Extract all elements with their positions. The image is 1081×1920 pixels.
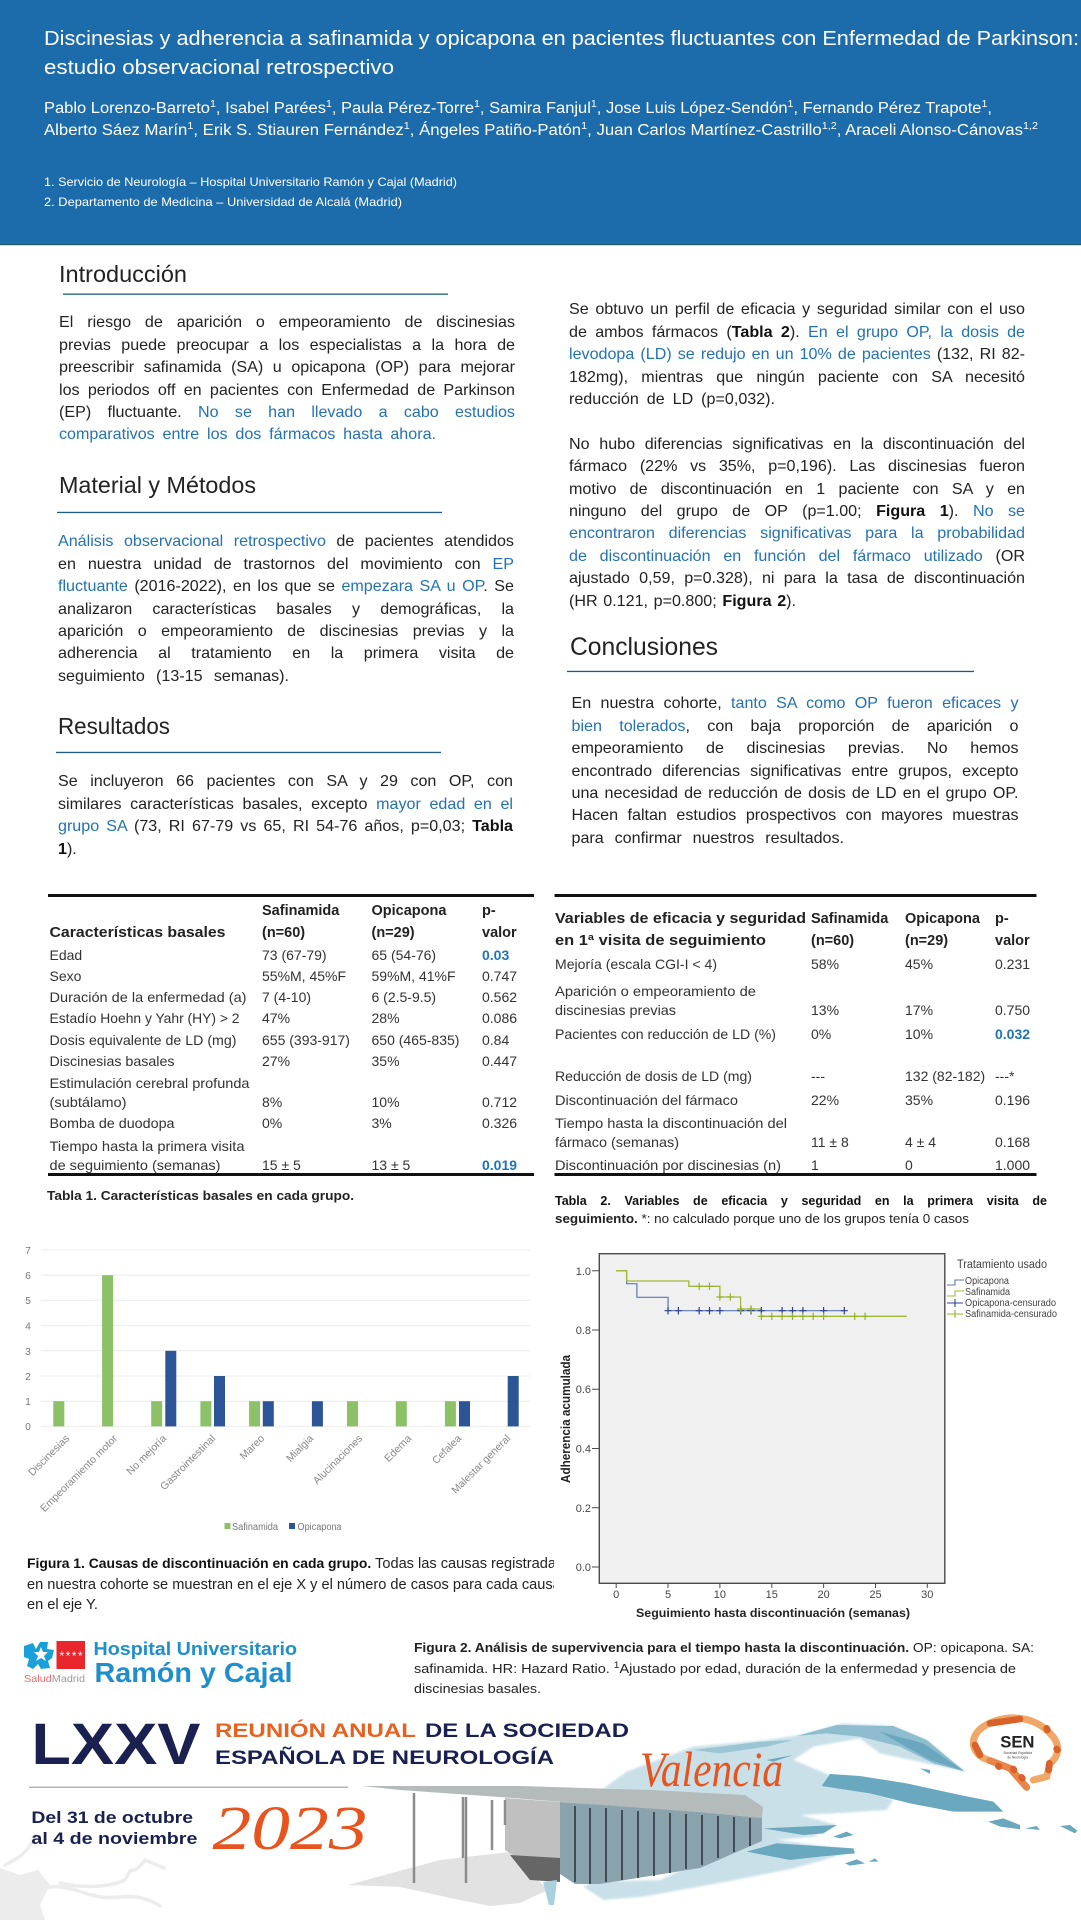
table 1: baseline characteristics (48, 894, 534, 1176)
figure 2 caption: 1 (614, 1660, 619, 1670)
table 1 rows: 27% (262, 1053, 290, 1069)
table 2 rows: 35% (905, 1092, 933, 1108)
table 1 header: valor (482, 925, 517, 941)
authors: , Jose Luis López-Sendón (597, 100, 788, 117)
affiliations: 2. Departamento de Medicina – Universidad de Alcalá (Madrid) (44, 195, 402, 209)
table 1 rows: 35% (372, 1053, 400, 1069)
safinamida bars (53, 1275, 456, 1426)
table 1 caption: Tabla 1. Características basales en cada grupo. (47, 1189, 354, 1203)
table 2 header (555, 911, 1030, 949)
authors: 1 (187, 121, 194, 132)
table 1 rows: 59%M, 41%F (372, 968, 456, 984)
heading: Conclusiones: Conclusiones (570, 633, 718, 661)
hospital logo: Hospital Universitario (94, 1639, 297, 1659)
survival legend: Safinamida-censurado (965, 1309, 1057, 1320)
text block: introducción: preescribir safinamida (SA) u opicapona (OP) para mejorar (59, 358, 515, 376)
hospital logo (24, 1639, 297, 1688)
y axis values: 1.0 (576, 1266, 591, 1278)
y axis values: 0.4 (576, 1444, 591, 1456)
table 1 rows: 28% (372, 1010, 400, 1026)
y axis values: 4 (25, 1322, 31, 1332)
table 1 rows: Sexo (50, 968, 82, 984)
table 2 rows: 132 (82-182) (905, 1068, 985, 1084)
table 1 rows: 0.562 (482, 989, 517, 1005)
x axis values: 30 (921, 1589, 933, 1601)
text block: resultados: similares características basales, excepto mayor edad en el (58, 794, 513, 812)
conference banner text: DE LA SOCIEDAD (425, 1720, 629, 1742)
table 2 rows: 0 (905, 1157, 913, 1173)
icon: red flag: **** (60, 1649, 83, 1663)
authors: , Paula Pérez-Torre (332, 100, 474, 117)
survival legend (947, 1259, 1057, 1320)
x axis categories: Mareo (238, 1433, 267, 1462)
text block: introducción: (EP) fluctuante. No se han llevado a cabo estudios (59, 402, 515, 420)
y axis values (576, 1266, 591, 1574)
table 1 rows: 0.03 (482, 947, 509, 963)
survival legend: Safinamida (965, 1287, 1010, 1298)
authors: 1 (404, 121, 410, 132)
table 1 rows: 650 (465-835) (372, 1032, 459, 1048)
table 1 header: p- (482, 903, 496, 919)
table 1 rows: Duración de la enfermedad (a) (50, 989, 246, 1005)
x axis categories: Malestar general (449, 1433, 513, 1496)
survival chart: Kaplan-Meier (558, 1254, 1057, 1620)
text block: discontinuación: ajustado 0,59, p=0.328), ni para la tasa de discontinuación (569, 568, 1025, 586)
text block: material y métodos: analizaron características basales y demográficas, la (58, 600, 514, 618)
SEN logo: de Neurología (1007, 1755, 1028, 1759)
table 1 rows: 73 (67-79) (262, 947, 327, 963)
Valencia lettering: Valencia (640, 1741, 783, 1797)
authors: 1 (788, 99, 794, 110)
table 1 rows: Estadío Hoehn y Yahr (HY) > 2 (50, 1010, 240, 1026)
y axis values: 2 (25, 1372, 31, 1383)
table 1 rows: 655 (393-917) (262, 1032, 350, 1048)
table 1 header (50, 903, 517, 941)
y axis values: 3 (25, 1347, 31, 1358)
survival legend: Opicapona (965, 1276, 1009, 1287)
table 2 caption, first line: Tabla 2. Variables de eficacia y seguridad en la primera visita de (555, 1194, 1047, 1208)
date: 2023: 2023 (212, 1795, 368, 1863)
x axis categories: Cefalea (430, 1433, 464, 1467)
text block: conclusiones: encontrado diferencias significativas entre grupos, excepto (572, 762, 1018, 780)
text block: resultados continued: 182mg), mientras que ningún paciente con SA necesitó (569, 368, 1025, 386)
table 1 rows: 13 ± 5 (372, 1157, 411, 1173)
y axis values: 1 (25, 1397, 31, 1408)
table 1 rows: 0.447 (482, 1053, 517, 1069)
table 1 rows: 3% (372, 1115, 392, 1131)
x axis categories: Edema (382, 1433, 414, 1465)
text block: conclusiones: Hacen faltan estudios prospectivos con mayores muestras (572, 806, 1018, 824)
y axis values: 0.0 (576, 1562, 591, 1574)
text block: discontinuación: encontraron diferencias significativas para la probabilidad (569, 524, 1025, 542)
authors: 1,2 (822, 121, 837, 132)
title: estudio observacional retrospectivo (44, 57, 394, 79)
table 1 header: (n=29) (372, 925, 415, 941)
text block: discontinuación: ninguno del grupo de OP (p=1.00; Figura 1). No se (569, 502, 1025, 520)
table 2 rows: Reducción de dosis de LD (mg) (555, 1068, 752, 1084)
table 1 rows: 0.326 (482, 1115, 517, 1131)
survival chart: Kaplan-Meier: Seguimiento hasta discontinuación (semanas) (636, 1608, 910, 1620)
y axis values (25, 1246, 31, 1433)
table 2 header: en 1ª visita de seguimiento (555, 933, 766, 949)
authors: , Juan Carlos Martínez-Castrillo (587, 122, 822, 139)
table 2 header: Opicapona (905, 911, 981, 927)
x axis values: 25 (869, 1589, 882, 1601)
y axis values: 6 (25, 1271, 31, 1282)
table 2 rows: Aparición o empeoramiento de (555, 983, 756, 999)
affiliations: 1. Servicio de Neurología – Hospital Universitario Ramón y Cajal (Madrid) (44, 175, 457, 189)
table 1 header: (n=60) (262, 925, 305, 941)
text block: resultados: 1). (58, 840, 77, 858)
table 2 header: Variables de eficacia y seguridad (555, 911, 806, 927)
survival legend: Opicapona-censurado (965, 1298, 1056, 1309)
table 2 rows: fármaco (semanas) (555, 1134, 679, 1150)
authors: Alberto Sáez Marín (44, 122, 177, 139)
table 1 rows: 0.019 (482, 1157, 517, 1173)
table 1 rows: de seguimiento (semanas) (50, 1157, 220, 1173)
table 2 rows: 0.168 (995, 1134, 1030, 1150)
table 2 rows: 58% (811, 956, 839, 972)
table 2 header: (n=60) (811, 933, 854, 949)
table 1 header: Opicapona (372, 903, 447, 919)
text block: introducción: los periodos off en pacientes con Enfermedad de Parkinson (59, 380, 515, 398)
text block: resultados continued: reducción de LD (p=0,032). (569, 390, 775, 408)
text block: conclusiones: bien tolerados, con baja proporción de aparición o (572, 716, 1018, 734)
text block: introducción: comparativos entre los dos fármacos hasta ahora. (59, 424, 436, 442)
opicapona curve (616, 1271, 844, 1311)
table 1 rows: 10% (372, 1094, 400, 1110)
table 1 rows: 0.712 (482, 1094, 517, 1110)
conference banner text: Del 31 de octubre (31, 1809, 193, 1827)
x axis categories: Alucinaciones (311, 1433, 365, 1487)
title: Discinesias y adherencia a safinamida y opicapona en pacientes fluctuantes con Enfermedad de Parkinson: (44, 28, 1079, 50)
table 2 rows: ---* (995, 1068, 1015, 1084)
table 2 rows: 10% (905, 1026, 933, 1042)
chart legend (224, 1522, 342, 1533)
SEN logo (973, 1718, 1058, 1787)
axis titles: Adherencia acumulada (558, 1354, 573, 1483)
text block: discontinuación: No hubo diferencias significativas en la discontinuación del (569, 434, 1025, 452)
authors: 1 (326, 99, 332, 110)
figure 1 caption: en nuestra cohorte se muestran en el eje X y el número de casos para cada causa (27, 1576, 554, 1592)
table 1 rows: 0% (262, 1115, 282, 1131)
text block: introducción: El riesgo de aparición o empeoramiento de discinesias (59, 312, 515, 330)
building illustration (348, 1786, 763, 1906)
table 2 rows: Pacientes con reducción de LD (%) (555, 1026, 776, 1042)
conference banner text (29, 1712, 629, 1863)
chart legend: Safinamida (232, 1522, 278, 1533)
background map texture (0, 1835, 164, 1920)
safinamida curve (616, 1271, 907, 1316)
text block: resultados continued (569, 300, 1025, 408)
figure 1 caption: en el eje Y. (27, 1597, 98, 1613)
table 1 rows: Dosis equivalente de LD (mg) (50, 1032, 237, 1048)
authors: , Erik S. Stiauren Fernández (193, 122, 404, 139)
table 1 rows: Tiempo hasta la primera visita (50, 1138, 245, 1154)
text block: introducción: previas puede preocupar a los especialistas a la hora de (59, 336, 515, 354)
authors: , Araceli Alonso-Cánovas (837, 122, 1023, 139)
affiliations (44, 175, 457, 209)
x axis values (613, 1589, 933, 1601)
authors: , Isabel Parées (216, 100, 326, 117)
text block: conclusiones: para confirmar nuestros resultados. (572, 828, 844, 846)
conference banner text: REUNIÓN ANUAL (215, 1718, 416, 1742)
heading: Material y Métodos: Material y Métodos (59, 472, 256, 498)
authors: 1 (581, 121, 588, 132)
authors: 1 (591, 99, 597, 110)
heading: Resultados: Resultados (58, 713, 170, 739)
table 1 rows: 0.747 (482, 968, 517, 984)
table 2 rows: 0.196 (995, 1092, 1030, 1108)
authors: , (987, 100, 992, 117)
text block: discontinuación (569, 434, 1025, 610)
table 1 rows: 15 ± 5 (262, 1157, 301, 1173)
table 1 rows: 55%M, 45%F (262, 968, 346, 984)
x axis categories: Mialgia (284, 1433, 316, 1465)
table 1 header: Características basales (50, 925, 226, 941)
table 2 caption, second line: seguimiento. *: no calculado porque uno de los grupos tenía 0 casos (555, 1212, 969, 1226)
opicapona censored marks (664, 1307, 848, 1314)
text block: resultados: grupo SA (73, RI 67-79 vs 65, RI 54-76 años, p=0,03; Tabla (58, 816, 513, 834)
chart legend: Opicapona (298, 1522, 342, 1533)
table 1 rows: Bomba de duodopa (50, 1115, 175, 1131)
authors: , Ángeles Patiño-Patón (410, 122, 581, 139)
safinamida censored marks (696, 1283, 869, 1320)
text block: material y métodos: adherencia al tratamiento en la primera visita de (58, 644, 514, 662)
table 2 rows: 22% (811, 1092, 839, 1108)
conference banner text: LXXV (31, 1712, 201, 1777)
icon: star (24, 1642, 54, 1669)
table 2 rows: 13% (811, 1002, 839, 1018)
text block: material y métodos: seguimiento (13-15 semanas). (58, 666, 289, 684)
table 2 rows: 45% (905, 956, 933, 972)
table 2 rows: 0.231 (995, 956, 1030, 972)
figure 2 caption: Ajustado por edad, duración de la enfermedad y presencia de (619, 1661, 1016, 1676)
y axis values: 0 (25, 1422, 31, 1433)
authors: , Samira Fanjul (480, 100, 591, 117)
authors: 1,2 (1023, 121, 1038, 132)
y axis values: 0.2 (576, 1503, 591, 1515)
figure 1 caption: Figura 1. Causas de discontinuación en cada grupo. Todas las causas registradas (27, 1555, 554, 1572)
table 2 rows: discinesias previas (555, 1002, 676, 1018)
y axis values: 7 (25, 1246, 31, 1257)
table 1 rows: Edad (50, 947, 82, 963)
table 1 rows: 7 (4-10) (262, 989, 311, 1005)
opicapona bars (165, 1351, 519, 1426)
x axis categories: Empeoramiento motor (38, 1432, 120, 1515)
authors: 1 (981, 99, 988, 110)
text block: discontinuación: fármaco (22% vs 35%, p=0,196). Las discinesias fueron (569, 456, 1025, 474)
table 1 rows: 47% (262, 1010, 290, 1026)
table 1 rows (50, 947, 517, 1173)
table 1 rows: 8% (262, 1094, 282, 1110)
table 2 header: Safinamida (811, 911, 889, 927)
x axis values: 5 (665, 1589, 671, 1601)
text block: resultados (58, 772, 514, 858)
x axis values: 0 (613, 1589, 619, 1601)
authors: , Fernando Pérez Trapote (793, 100, 981, 117)
table 1 rows: 6 (2.5-9.5) (372, 989, 436, 1005)
text block: introducción (59, 312, 515, 442)
table 2 rows: Mejoría (escala CGI-I < 4) (555, 956, 717, 972)
hospital logo: Ramón y Cajal (94, 1657, 292, 1688)
table 2 rows: 1.000 (995, 1157, 1030, 1173)
table 2 rows: 17% (905, 1002, 933, 1018)
text block: material y métodos: aparición o empeoramiento de discinesias previas y la (58, 622, 514, 640)
hospital logo: SaludMadrid (24, 1673, 85, 1685)
SEN logo: Sociedad Española (1003, 1751, 1032, 1755)
table 2 header: p- (995, 911, 1009, 927)
bar chart: causes of discontinuation (25, 1246, 530, 1533)
x axis values: 15 (766, 1589, 778, 1601)
y axis values: 0.8 (576, 1325, 591, 1337)
y axis values: 5 (25, 1296, 31, 1307)
text block: material y métodos (58, 532, 514, 684)
heading: Introducción: Introducción (59, 261, 187, 287)
table 2 rows: --- (811, 1068, 825, 1084)
table 2 rows (555, 956, 1030, 1173)
figure 2 caption (414, 1640, 1034, 1696)
authors: 1 (474, 99, 480, 110)
x axis categories: Discinesias (26, 1433, 72, 1479)
conference banner text: ESPAÑOLA DE NEUROLOGÍA (215, 1746, 554, 1769)
text block: resultados: Se incluyeron 66 pacientes con SA y 29 con OP, con (58, 772, 513, 790)
title (44, 28, 1079, 79)
figure 2 caption: Figura 2. Análisis de supervivencia para el tiempo hasta la discontinuación. OP: opicapona. SA: (414, 1640, 1034, 1655)
conference banner text: al 4 de noviembre (31, 1830, 197, 1848)
y axis values: 0.6 (576, 1384, 591, 1396)
figure 1 caption (27, 1555, 554, 1613)
table 2 rows: 1 (811, 1157, 819, 1173)
table 2 rows: 0.750 (995, 1002, 1030, 1018)
x axis values: 10 (714, 1589, 726, 1601)
text block: resultados continued: levodopa (LD) se redujo en un 10% de pacientes (132, RI 82- (569, 344, 1025, 362)
table 2 rows: 0.032 (995, 1026, 1030, 1042)
table 1 rows: (subtálamo) (50, 1094, 126, 1110)
text block: resultados continued: de ambos fármacos (Tabla 2). En el grupo OP, la dosis de (569, 322, 1025, 340)
text block: conclusiones: empeoramiento de discinesias previas. No hemos (572, 738, 1018, 756)
survival legend: Tratamiento usado (957, 1259, 1047, 1271)
table 2 header: (n=29) (905, 933, 948, 949)
figure 2 caption: safinamida. HR: Hazard Ratio. (414, 1661, 587, 1676)
text block: discontinuación: de discontinuación en función del fármaco utilizado (OR (569, 546, 1025, 564)
text block: discontinuación: (HR 0.121, p=0.800; Figura 2). (569, 592, 796, 610)
table 1 rows: 0.086 (482, 1010, 517, 1026)
text block: conclusiones: una necesidad de reducción de dosis de LD en el grupo OP. (572, 784, 1018, 802)
x axis categories: Gastrointestinal (158, 1433, 218, 1493)
table 1 rows: Estimulación cerebral profunda (50, 1075, 250, 1091)
table 2: efficacy and safety (554, 894, 1036, 1176)
authors (44, 99, 1038, 139)
text block: conclusiones: En nuestra cohorte, tanto SA como OP fueron eficaces y (572, 694, 1018, 712)
x axis categories: No mejoría (124, 1433, 169, 1477)
icon: red flag (56, 1641, 85, 1669)
text block: conclusiones (572, 694, 1018, 846)
table 2 rows: Discontinuación del fármaco (555, 1092, 738, 1108)
text block: material y métodos: Análisis observacional retrospectivo de pacientes atendidos (58, 532, 514, 550)
text block: material y métodos: en nuestra unidad de trastornos del movimiento con EP (58, 554, 514, 572)
table 2 rows: 4 ± 4 (905, 1134, 936, 1150)
text block: discontinuación: motivo de discontinuación en 1 paciente con SA y en (569, 480, 1025, 498)
watercolor illustration (583, 1723, 1077, 1900)
table 2 header: valor (995, 933, 1030, 949)
table 2 rows: 11 ± 8 (811, 1134, 849, 1150)
SEN logo: SEN (1000, 1733, 1034, 1752)
table 1 rows: 0.84 (482, 1032, 509, 1048)
table 1 rows: Discinesias basales (50, 1053, 174, 1069)
text block: resultados continued: Se obtuvo un perfil de eficacia y seguridad similar con el uso (569, 300, 1025, 318)
authors: 1 (210, 99, 216, 110)
figure 2 caption: discinesias basales. (414, 1681, 541, 1696)
table 2 rows: Tiempo hasta la discontinuación del (555, 1115, 787, 1131)
table 1 header: Safinamida (262, 903, 340, 919)
x axis values: 20 (817, 1589, 830, 1601)
table 2 rows: 0% (811, 1026, 831, 1042)
table 2 rows: Discontinuación por discinesias (n) (555, 1157, 781, 1173)
text block: material y métodos: fluctuante (2016-2022), en los que se empezara SA u OP. Se (58, 576, 514, 594)
header banner (0, 0, 1081, 245)
authors: Pablo Lorenzo-Barreto (44, 100, 200, 117)
x axis categories (26, 1432, 513, 1515)
table 1 rows: 65 (54-76) (372, 947, 436, 963)
